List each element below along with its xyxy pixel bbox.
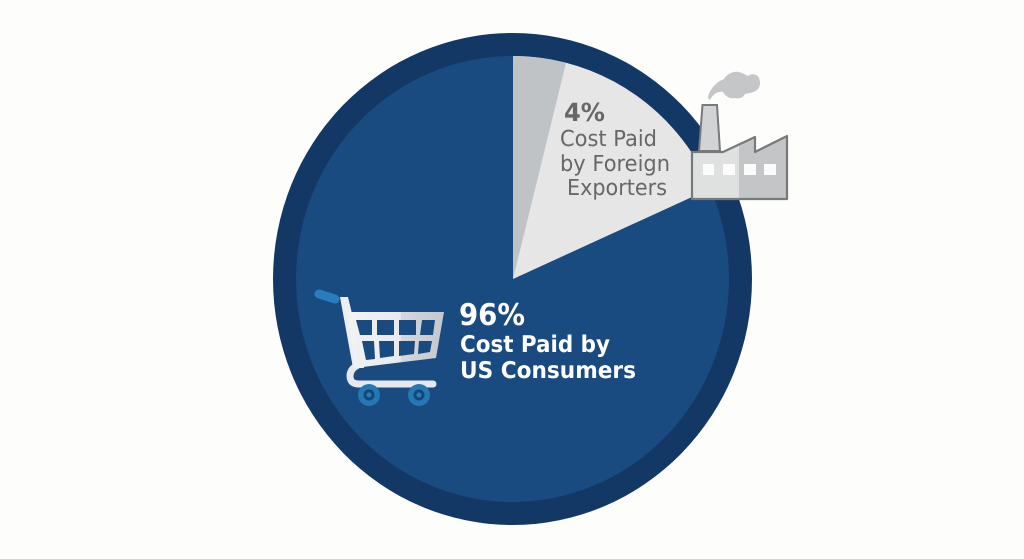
pie outer ring — [273, 33, 752, 525]
text: by Foreign: by Foreign — [560, 152, 670, 177]
factory building — [692, 136, 787, 199]
value: 4%: 4% — [564, 98, 605, 127]
cart basket — [347, 312, 444, 368]
text: Exporters: Exporters — [567, 176, 667, 201]
label: 4% cost paid by foreign exporters — [560, 98, 670, 201]
wheel left — [358, 384, 380, 406]
smoke — [708, 72, 760, 100]
chimney — [699, 105, 720, 151]
cart rail — [350, 365, 433, 384]
text: Cost Paid: Cost Paid — [560, 127, 657, 152]
slice: 96% US consumers — [296, 56, 729, 502]
cart handle — [319, 294, 335, 299]
icon: factory — [692, 72, 787, 199]
text: US Consumers: US Consumers — [460, 358, 636, 384]
factory windows — [703, 164, 776, 175]
slice: 4% foreign exporters — [513, 56, 692, 279]
wheel right — [408, 384, 430, 406]
icon: shopping cart — [319, 294, 444, 406]
value: 96%: 96% — [459, 298, 525, 333]
pie chart — [273, 33, 752, 525]
text: Cost Paid by: Cost Paid by — [460, 332, 610, 358]
label: 96% cost paid by US consumers — [459, 298, 636, 384]
cart post — [340, 297, 364, 368]
